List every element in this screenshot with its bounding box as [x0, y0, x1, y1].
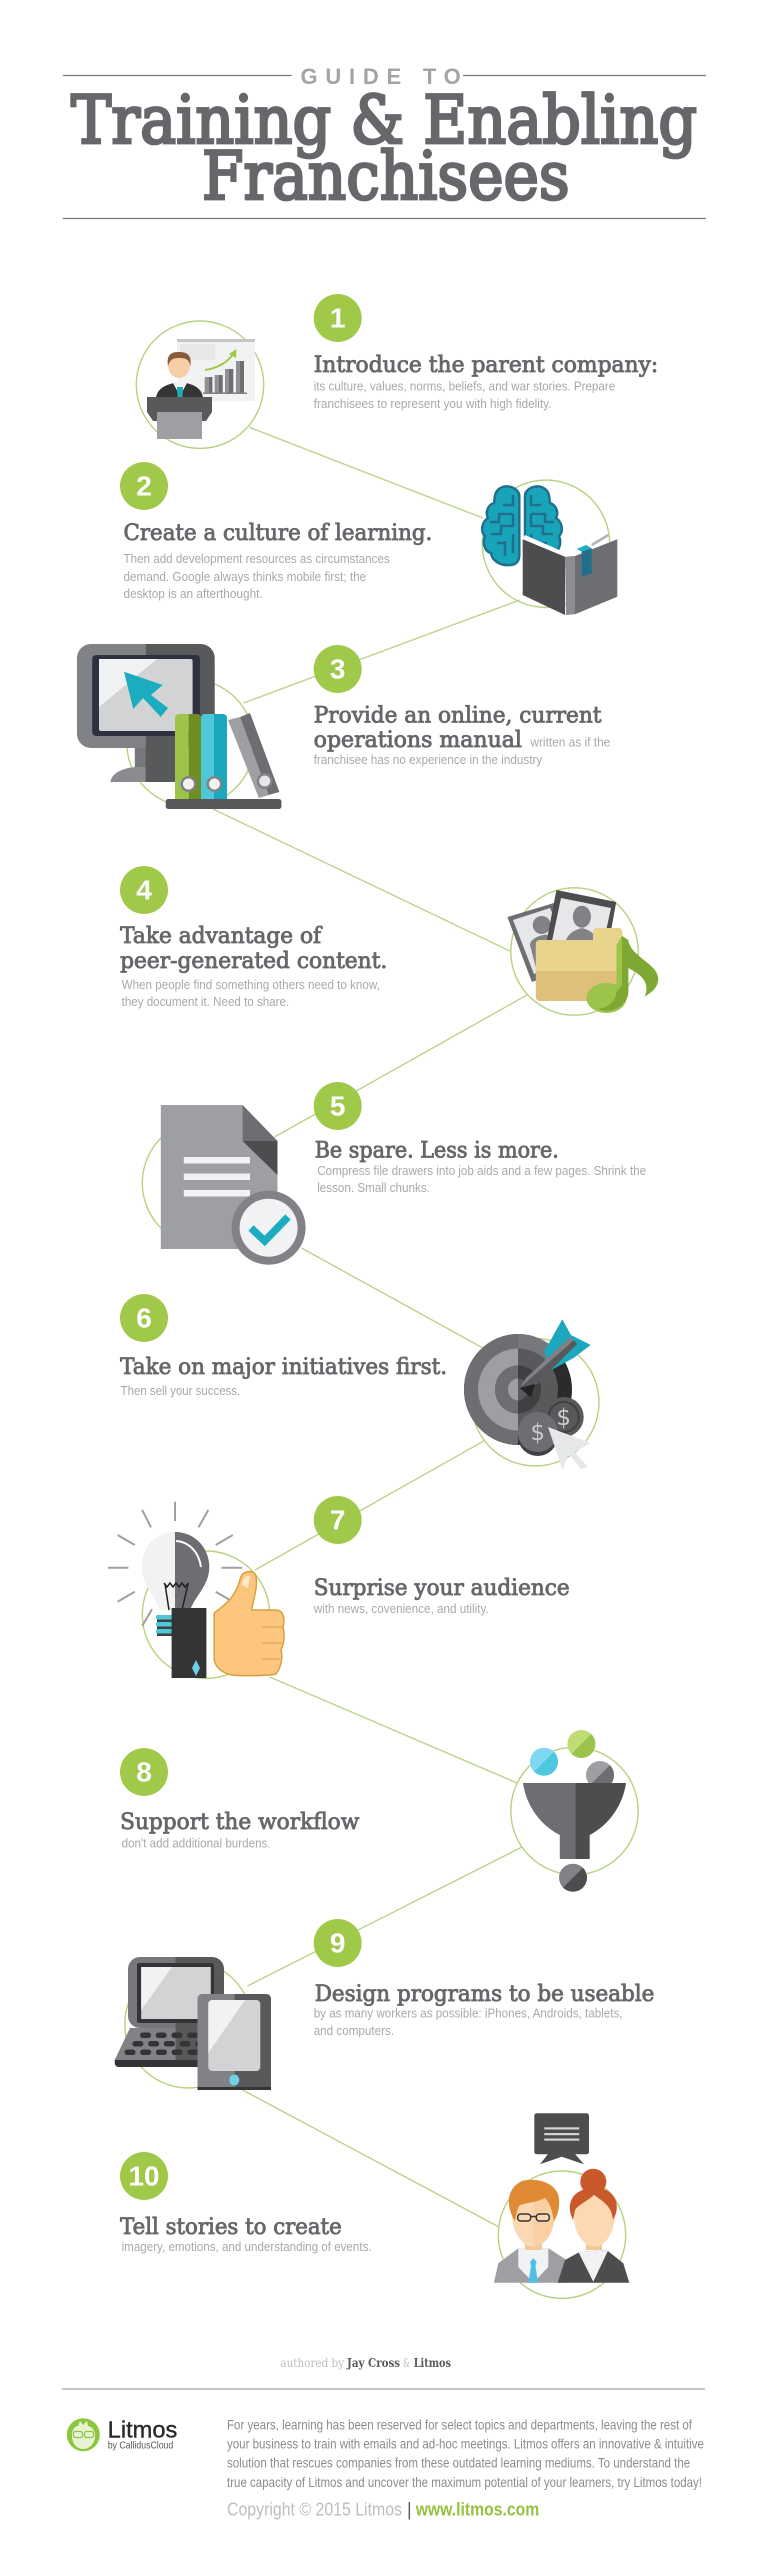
body text 10: imagery, emotions, and understanding of events.: [122, 2239, 372, 2254]
number badge 7: [314, 1496, 362, 1544]
number badge 5: 5: [330, 1090, 345, 1122]
step 3: provide an online, current operations manual: [77, 644, 610, 809]
number badge 1: [314, 294, 362, 342]
body text 8: don't add additional burdens.: [122, 1836, 271, 1851]
icon: target, arrow, coins and cursor: $: [530, 1420, 545, 1446]
step 1: introduce the parent company: [136, 294, 658, 448]
title: Training & Enabling: [71, 82, 697, 159]
heading 5: Be spare. Less is more.: [315, 1139, 559, 1164]
heading 4: Take advantage of: [120, 924, 323, 949]
number badge 10: [120, 2152, 168, 2200]
icon: target, arrow, coins and cursor: [464, 1319, 599, 1470]
author credit: [280, 2355, 451, 2370]
heading 10: Tell stories to create: [120, 2215, 342, 2240]
heading 4: peer-generated content.: [120, 949, 387, 974]
header: [63, 64, 706, 218]
icon: document with check: [142, 1105, 306, 1265]
body text 2: desktop is an afterthought.: [124, 586, 263, 601]
body text 4: When people find something others need to know,: [122, 977, 380, 992]
kicker: guide to: GUIDE TO: [300, 64, 461, 89]
footer logo: Litmos: by CallidusCloud: [108, 2440, 173, 2452]
icon: presenter at lectern: [136, 321, 264, 448]
footer copyright and website: www.litmos.com: [415, 2500, 539, 2520]
body text 9: [314, 2006, 622, 2038]
number badge 6: 6: [136, 1302, 152, 1334]
footer copyright and website: [227, 2500, 539, 2520]
step 5: be spare, less is more: [142, 1082, 646, 1265]
number badge 1: 1: [330, 302, 345, 334]
number badge 3: [314, 645, 362, 693]
number badge 8: [120, 1748, 168, 1796]
body text 5: Compress file drawers into job aids and a few pages. Shrink the: [317, 1163, 646, 1178]
number badge 2: [120, 462, 168, 510]
icon: monitor and binders: [77, 644, 281, 809]
heading 3: [314, 704, 602, 753]
icon: brain and book: [482, 480, 617, 615]
title: [71, 82, 697, 215]
body text 1: its culture, values, norms, beliefs, and war stories. Prepare: [314, 378, 615, 394]
body text 9: by as many workers as possible: iPhones, Androids, tablets,: [314, 2006, 622, 2021]
author credit: Litmos: [414, 2355, 451, 2370]
body text 3: written as if the: [529, 735, 610, 750]
heading 2: Create a culture of learning.: [124, 521, 432, 546]
icon: photos, folder and music note: [507, 888, 658, 1015]
number badge 9: [314, 1919, 362, 1967]
body text 4: [122, 977, 380, 1009]
body text 1: [314, 378, 615, 411]
footer logo: Litmos: Litmos: [108, 2417, 177, 2443]
body text 7: with news, covenience, and utility.: [313, 1601, 489, 1616]
step 7: surprise your audience: [108, 1496, 570, 1678]
number badge 10: 10: [128, 2160, 160, 2192]
step 4: take advantage of peer-generated content: [120, 866, 658, 1015]
number badge 4: [120, 866, 168, 914]
author credit: &: [403, 2355, 410, 2370]
body text 3: [314, 735, 610, 767]
heading 9: Design programs to be useable: [315, 1982, 654, 2007]
step 10: tell stories to create: [120, 2113, 629, 2298]
step 2: create a culture of learning: [120, 462, 617, 615]
icon: laptop and tablet: [115, 1957, 271, 2090]
number badge 9: 9: [330, 1928, 345, 1958]
icon: target, arrow, coins and cursor: $: [556, 1405, 571, 1431]
heading 6: Take on major initiatives first.: [120, 1355, 447, 1380]
body text 5: [317, 1163, 646, 1195]
heading 3: operations manual: [314, 728, 522, 753]
number badge 5: [314, 1082, 362, 1130]
number badge 8: 8: [136, 1756, 152, 1788]
number badge 7: 7: [330, 1504, 345, 1536]
body text 5: lesson. Small chunks.: [317, 1180, 430, 1195]
body text 2: demand. Google always thinks mobile first; the: [124, 569, 366, 584]
number badge 4: 4: [136, 874, 152, 906]
icon: speech bubble and two people: [494, 2113, 629, 2298]
connector lines between steps: [213, 427, 527, 2227]
heading 3: Provide an online, current: [314, 704, 602, 729]
body text 6: Then sell your success.: [121, 1383, 240, 1398]
body text 9: and computers.: [314, 2023, 394, 2038]
body text 1: franchisees to represent you with high fidelity.: [314, 396, 552, 411]
step 6: take on major initiatives first: [120, 1294, 599, 1470]
icon: light bulb and thumbs up: [108, 1502, 284, 1678]
body text 4: they document it. Need to share.: [122, 994, 289, 1009]
body text 3: franchisee has no experience in the industry: [314, 752, 543, 767]
number badge 6: [120, 1294, 168, 1342]
title: Franchisees: [202, 138, 570, 215]
author credit: authored by: [280, 2355, 345, 2370]
step 9: design programs to be useable: [115, 1919, 654, 2090]
footer logo: Litmos: [67, 2417, 177, 2452]
footer copyright and website: |: [407, 2500, 412, 2520]
heading 4: [120, 924, 387, 974]
heading 8: Support the workflow: [120, 1810, 359, 1835]
heading 1: Introduce the parent company:: [314, 353, 658, 378]
heading 7: Surprise your audience: [314, 1576, 570, 1601]
body text 2: Then add development resources as circumstances: [124, 551, 390, 566]
number badge 3: 3: [330, 654, 345, 684]
footer paragraph: [227, 2416, 704, 2490]
number badge 2: 2: [136, 470, 152, 502]
icon: funnel and balls: [511, 1730, 638, 1892]
step 8: support the workflow: [120, 1730, 638, 1892]
body text 2: [124, 551, 390, 601]
footer copyright and website: Copyright © 2015 Litmos: [227, 2500, 402, 2520]
author credit: Jay Cross: [346, 2355, 400, 2370]
